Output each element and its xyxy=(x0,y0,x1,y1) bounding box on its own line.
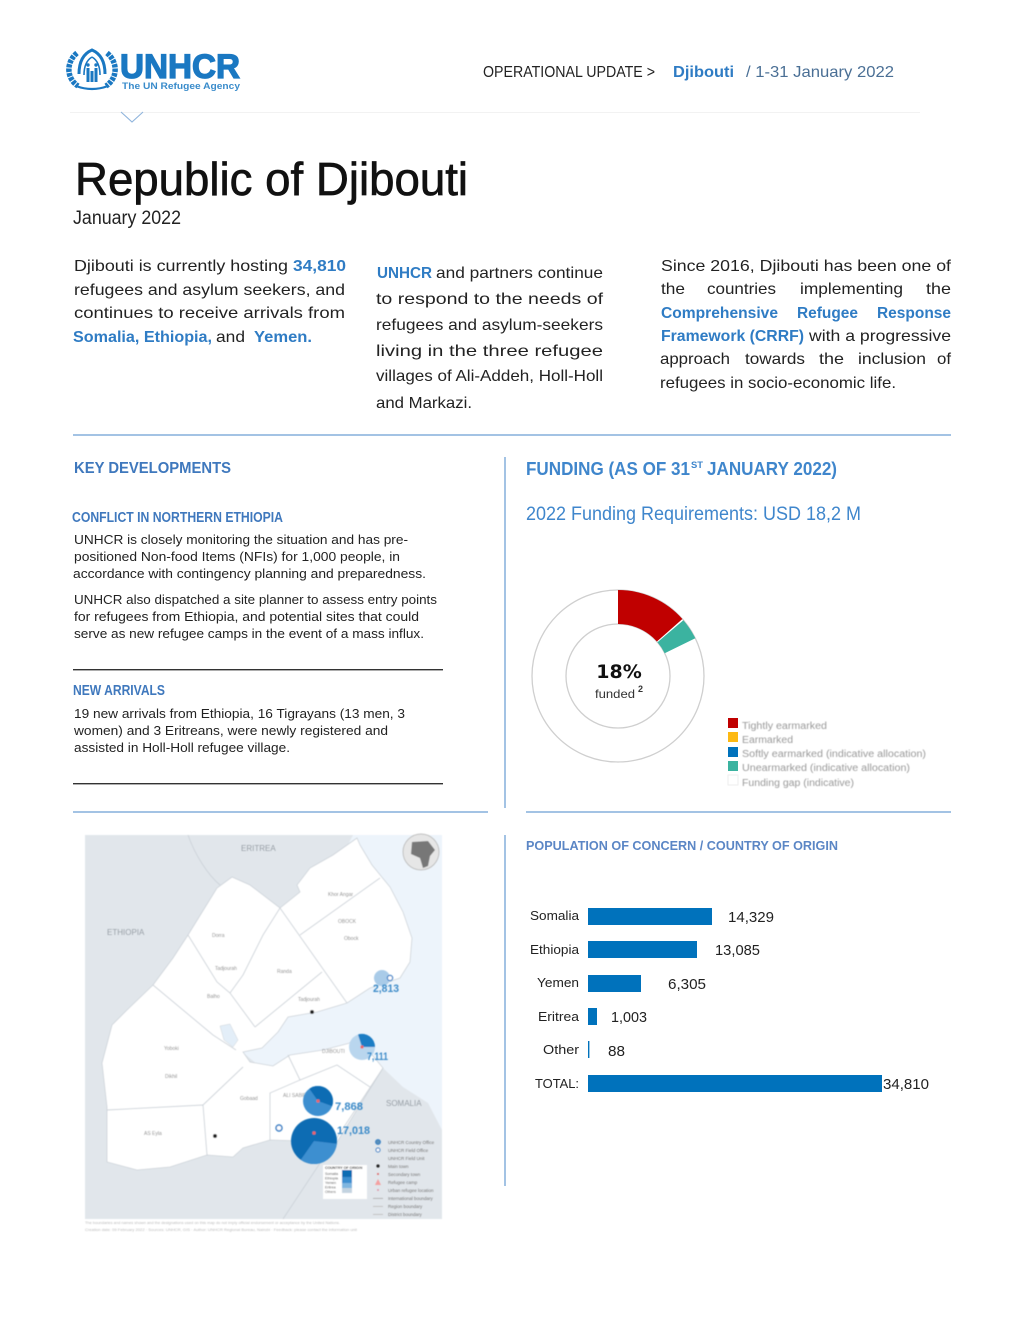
category labels: Eritrea xyxy=(538,1009,580,1024)
UNHCR logo xyxy=(69,48,241,92)
panel: key developments xyxy=(72,460,443,784)
value labels: 13,085 xyxy=(715,942,760,959)
intro column 1: Somalia, Ethiopia, xyxy=(73,329,212,346)
map refugee circles xyxy=(276,970,393,1164)
map legend: UNHCR Country Office xyxy=(388,1140,435,1145)
text block: new arrivals xyxy=(73,706,405,755)
intro column 3: the xyxy=(661,281,685,298)
map refugee figures: 7,868 xyxy=(335,1101,363,1113)
donut legend: Earmarked xyxy=(742,735,793,746)
globe inset xyxy=(403,834,439,870)
intro column 3: Since 2016, Djibouti has been one of xyxy=(661,258,952,275)
text block: conflict paragraphs xyxy=(73,532,438,641)
value labels: 1,003 xyxy=(611,1009,647,1026)
map labels: places: Balho xyxy=(207,994,220,1000)
map labels: places: Dorra xyxy=(212,933,225,939)
intro column 2: refugees and asylum-seekers xyxy=(376,317,603,334)
intro column 3: with a progressive xyxy=(808,328,951,345)
map labels: places: Khor Angar xyxy=(328,892,353,898)
map country of origin table xyxy=(323,1165,367,1199)
donut legend: Unearmarked (indicative allocation) xyxy=(742,763,910,774)
intro column 3: Refugee xyxy=(797,305,858,322)
text block: conflict paragraphs: for refugees from Ethiopia, and potential sites that could xyxy=(74,609,419,624)
intro column 2: living in the three refugee xyxy=(376,343,603,360)
map labels: places: ALI SABIEH xyxy=(283,1093,311,1099)
bar chart xyxy=(530,908,929,1093)
heading: funding: FUNDING (AS OF 31 xyxy=(526,459,690,479)
category labels: Ethiopia xyxy=(530,942,580,957)
intro column 1: continues to receive arrivals from xyxy=(74,305,345,322)
header breadcrumb: Djibouti xyxy=(673,64,734,81)
intro column 3: inclusion xyxy=(858,351,926,368)
icon: chevron xyxy=(121,112,143,122)
map labels: neighbouring countries: SOMALIA xyxy=(386,1099,422,1108)
map labels: places: Tadjourah xyxy=(215,966,237,972)
map legend: International boundary xyxy=(388,1196,434,1201)
date: January 2022 xyxy=(73,208,181,229)
map refugee figures: 7,111 xyxy=(367,1051,388,1063)
category labels: Other xyxy=(543,1042,580,1057)
text block: new arrivals: 19 new arrivals from Ethiopia, 16 Tigrayans (13 men, 3 xyxy=(74,706,405,721)
map labels: places: Tadjourah xyxy=(298,997,320,1003)
map labels: places: Dikhil xyxy=(165,1074,177,1080)
map labels: places: Randa xyxy=(277,969,292,975)
intro column 3: of xyxy=(937,351,952,368)
map footnote xyxy=(85,1221,357,1232)
intro column 1 xyxy=(73,258,346,346)
intro column 3: towards xyxy=(745,351,805,368)
category labels: Yemen xyxy=(537,975,579,990)
map country of origin table: COUNTRY OF ORIGIN xyxy=(325,1166,363,1170)
map footnote: The boundaries and names shown and the designations used on this map do not imply official endorsement or acceptance by the United Nations. xyxy=(85,1221,340,1225)
donut legend: Funding gap (indicative) xyxy=(742,778,854,789)
logo wordmark: UNHCR xyxy=(120,48,240,86)
text block: conflict paragraphs: serve as new refugee camps in the event of a mass influx. xyxy=(74,626,424,641)
subheading: new arrivals: NEW ARRIVALS xyxy=(73,683,165,699)
map labels: places: Obock xyxy=(344,936,359,942)
map refugee figures xyxy=(335,983,399,1137)
logo tagline: The UN Refugee Agency xyxy=(122,81,241,92)
title: Republic of Djibouti xyxy=(75,153,468,205)
donut chart: funded xyxy=(595,687,635,701)
map labels: places: AS Eyla xyxy=(144,1131,162,1137)
funding requirements: 2022 Funding Requirements: USD 18,2 M xyxy=(526,504,861,525)
map country of origin table: Eritrea xyxy=(325,1186,336,1190)
map legend: UNHCR Field Unit xyxy=(388,1156,425,1161)
map legend: District boundary xyxy=(388,1212,423,1217)
map legend: Region boundary xyxy=(388,1204,423,1209)
map legend xyxy=(373,1140,435,1217)
map legend: Refugee camp xyxy=(388,1180,418,1185)
donut chart xyxy=(532,590,704,762)
text block: new arrivals: assisted in Holl-Holl refugee village. xyxy=(74,740,290,755)
header breadcrumb: OPERATIONAL UPDATE > xyxy=(483,64,655,81)
map legend: Main town xyxy=(388,1164,409,1169)
map legend: Secondary town xyxy=(388,1172,421,1177)
map labels: places: Gobaad xyxy=(240,1096,258,1102)
map country of origin table: Yemen xyxy=(325,1181,336,1185)
subheading: conflict in northern Ethiopia: CONFLICT IN NORTHERN ETHIOPIA xyxy=(72,510,283,526)
category labels: TOTAL: xyxy=(535,1076,579,1091)
intro column 1: Yemen. xyxy=(254,329,312,346)
intro column 2: to respond to the needs of xyxy=(376,291,604,308)
map country of origin table: Others xyxy=(325,1190,336,1194)
panel: funding xyxy=(526,459,926,789)
header breadcrumb xyxy=(483,64,894,81)
value labels: 14,329 xyxy=(728,909,774,926)
intro column 3: countries xyxy=(707,281,776,298)
text block: conflict paragraphs: UNHCR is closely monitoring the situation and has pre- xyxy=(74,532,408,547)
category labels xyxy=(530,908,580,1091)
value labels: 34,810 xyxy=(883,1076,929,1093)
donut legend xyxy=(728,718,926,789)
text block: conflict paragraphs: positioned Non-food Items (NFIs) for 1,000 people, in xyxy=(74,549,400,564)
map footnote: Creation date: 09 February 2022 · Sources: UNHCR, GIS · Author: UNHCR Regional Bureau, Nairobi · Feedback: please contact the information unit xyxy=(85,1228,357,1232)
map labels: neighbouring countries xyxy=(107,844,422,1108)
map labels: places: OBOCK xyxy=(338,919,357,925)
map country of origin table: Somalia xyxy=(325,1172,338,1176)
intro column 1: Djibouti is currently hosting xyxy=(74,258,288,275)
intro column 2 xyxy=(376,265,604,412)
intro column 2: villages of Ali-Addeh, Holl-Holl xyxy=(376,368,603,385)
text block: new arrivals: women) and 3 Eritreans, were newly registered and xyxy=(73,723,388,738)
heading: key developments: KEY DEVELOPMENTS xyxy=(74,460,231,477)
intro column 2: UNHCR xyxy=(377,265,432,282)
intro column 3: the xyxy=(819,351,844,368)
heading: population of concern: POPULATION OF CONCERN / COUNTRY OF ORIGIN xyxy=(526,838,838,853)
donut chart: 2 xyxy=(638,684,643,694)
icon: UNHCR emblem xyxy=(69,50,115,89)
header breadcrumb: / 1-31 January 2022 xyxy=(746,64,894,81)
map legend: UNHCR Field Office xyxy=(388,1148,429,1153)
intro column 1: 34,810 xyxy=(293,258,346,275)
value labels: 6,305 xyxy=(668,976,706,993)
value labels xyxy=(608,909,929,1093)
map base xyxy=(85,834,442,1219)
map refugee figures: 17,018 xyxy=(337,1125,370,1137)
map labels: places xyxy=(144,892,359,1137)
map labels: neighbouring countries: ETHIOPIA xyxy=(107,928,145,937)
intro column 3: implementing xyxy=(800,281,903,298)
map country of origin table: Ethiopia xyxy=(325,1176,338,1180)
intro column 3: Response xyxy=(877,305,951,322)
category labels: Somalia xyxy=(530,908,580,923)
intro column 2: and Markazi. xyxy=(376,395,472,412)
bars xyxy=(588,908,882,1092)
intro column 2: and partners continue xyxy=(436,265,603,282)
intro column 3: the xyxy=(926,281,951,298)
donut legend: Tightly earmarked xyxy=(742,721,827,732)
map labels: places: DJIBOUTI xyxy=(322,1049,345,1055)
heading: funding: ST xyxy=(691,460,703,471)
donut chart: 18% xyxy=(596,661,642,683)
panel: map of Djibouti xyxy=(85,834,442,1232)
intro column 3: Framework (CRRF) xyxy=(661,328,804,345)
donut legend: Softly earmarked (indicative allocation) xyxy=(742,749,926,760)
map refugee figures: 2,813 xyxy=(373,983,399,995)
map labels: neighbouring countries: ERITREA xyxy=(241,844,276,853)
value labels: 88 xyxy=(608,1043,625,1060)
text block: conflict paragraphs: UNHCR also dispatched a site planner to assess entry points xyxy=(74,592,438,607)
intro column 3: approach xyxy=(660,351,730,368)
heading: funding: JANUARY 2022) xyxy=(707,459,837,479)
map labels: places: Yoboki xyxy=(164,1046,179,1052)
intro column 3 xyxy=(660,258,952,392)
intro column 1: and xyxy=(216,329,245,346)
heading: funding xyxy=(526,459,837,479)
panel: population of concern xyxy=(526,838,929,1093)
intro column 1: refugees and asylum seekers, and xyxy=(74,282,345,299)
intro column 3: refugees in socio-economic life. xyxy=(660,375,896,392)
text block: conflict paragraphs: accordance with contingency planning and preparedness. xyxy=(73,566,426,581)
map legend: Urban refugee location xyxy=(388,1188,434,1193)
intro column 3: Comprehensive xyxy=(661,305,778,322)
